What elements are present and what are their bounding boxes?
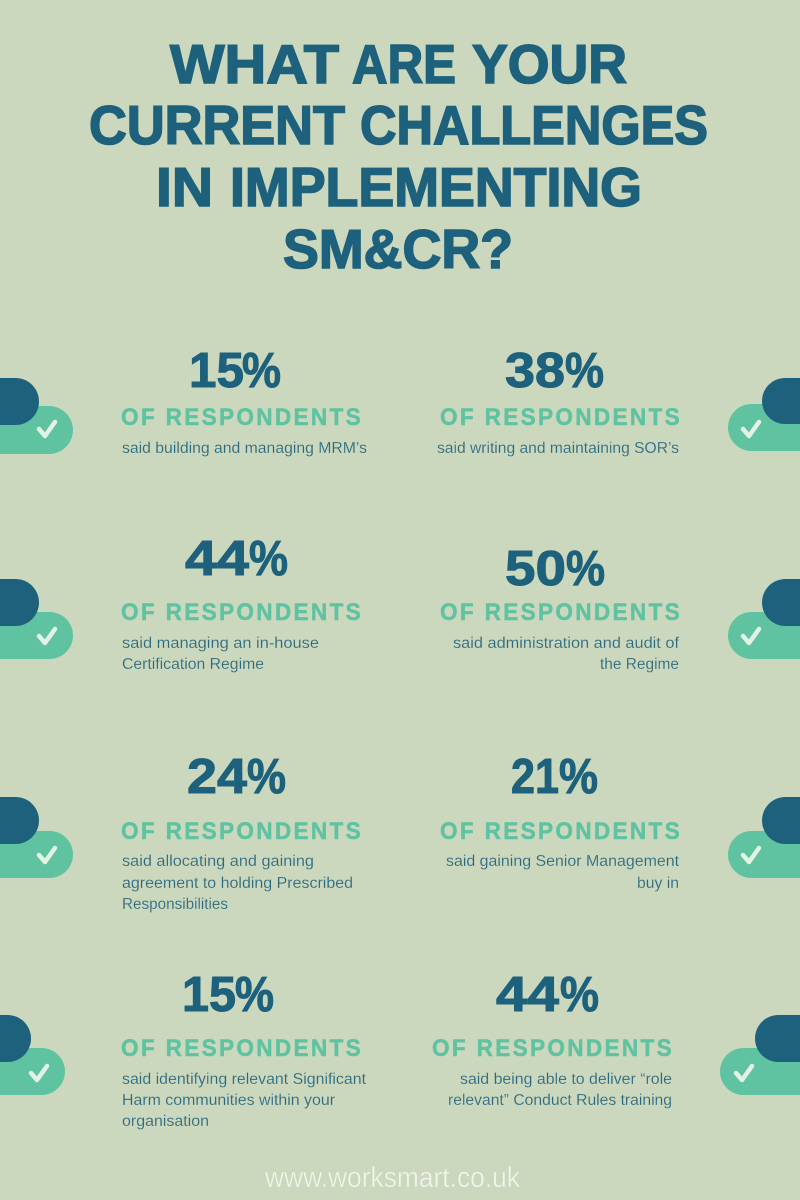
stat: 44% conduct rules: 44	[496, 968, 559, 1022]
icon: right check 3	[728, 797, 800, 878]
icon: right check 4	[720, 1015, 800, 1095]
stat: 24% prescribed responsibilities: 24	[187, 750, 247, 804]
website url: www.worksmart.co.uk	[264, 1162, 520, 1194]
stat: 24% prescribed responsibilities: Responsibilities	[122, 896, 228, 913]
stat: 21% senior management: OF RESPONDENTS	[440, 818, 682, 845]
stat: 44% conduct rules	[432, 968, 674, 1109]
stat: 15% significant harm: said identifying relevant Significant	[122, 1071, 367, 1088]
title: IMPLEMENTING	[230, 156, 642, 218]
icon: left check 4	[0, 1015, 65, 1095]
stat: 38% writing SORs	[437, 344, 682, 457]
stat: 24% prescribed responsibilities: %	[247, 750, 286, 804]
stat: 50% administration and audit: said administration and audit of	[453, 635, 680, 652]
stat: 44% conduct rules: %	[560, 968, 599, 1022]
icon: right check 1	[728, 378, 800, 451]
stat: 50% administration and audit: %	[566, 542, 605, 596]
stat: 44% in-house certification: OF RESPONDENTS	[121, 599, 363, 626]
stat: 44% conduct rules: relevant” Conduct Rules training	[448, 1092, 672, 1109]
stat: 24% prescribed responsibilities	[121, 750, 363, 913]
stat: 21% senior management: 21	[511, 750, 559, 804]
stat: 15% building MRMs: %	[242, 344, 281, 398]
title: SM&CR?	[283, 218, 513, 280]
stat: 44% in-house certification: %	[249, 532, 288, 586]
stat: 15% significant harm: %	[235, 968, 274, 1022]
title: IN	[156, 156, 213, 218]
stat: 44% conduct rules: OF RESPONDENTS	[432, 1035, 674, 1062]
stat: 50% administration and audit: the Regime	[600, 656, 679, 673]
stat: 44% in-house certification: Certification Regime	[122, 656, 264, 673]
stat: 15% significant harm: 15	[182, 968, 236, 1022]
stat: 15% building MRMs: said building and managing MRM’s	[122, 440, 367, 457]
stat: 44% in-house certification: 44	[185, 532, 249, 586]
icon: left check 3	[0, 797, 73, 878]
stat: 38% writing SORs: %	[565, 344, 604, 398]
icon: right check 2	[728, 579, 800, 659]
stat: 21% senior management	[440, 750, 682, 892]
stat: 50% administration and audit	[440, 542, 682, 673]
stat: 50% administration and audit: 50	[505, 542, 566, 596]
title: WHAT	[170, 33, 339, 95]
stat: 15% significant harm: Harm communities within your	[122, 1092, 335, 1109]
stat: 44% conduct rules: said being able to deliver “role	[460, 1071, 672, 1088]
title: ARE	[352, 33, 456, 95]
stat: 21% senior management: %	[559, 750, 598, 804]
stat: 38% writing SORs: OF RESPONDENTS	[440, 404, 682, 431]
stat: 38% writing SORs: 38	[505, 344, 565, 398]
icon: left check 1	[0, 378, 73, 454]
stat: 15% building MRMs: 15	[189, 344, 244, 398]
stat: 44% in-house certification: said managing an in-house	[122, 635, 319, 652]
stat: 44% in-house certification	[121, 532, 363, 673]
stat: 38% writing SORs: said writing and maintaining SOR’s	[437, 440, 679, 457]
stat: 21% senior management: buy in	[637, 875, 679, 892]
stat: 15% building MRMs	[121, 344, 367, 457]
stat: 15% significant harm: OF RESPONDENTS	[121, 1035, 363, 1062]
title: YOUR	[472, 33, 627, 95]
stat: 15% significant harm	[121, 968, 367, 1130]
title: CURRENT	[89, 94, 345, 156]
title	[89, 33, 708, 280]
stat: 50% administration and audit: OF RESPONDENTS	[440, 599, 682, 626]
title: CHALLENGES	[360, 94, 708, 156]
stat: 24% prescribed responsibilities: said allocating and gaining	[122, 853, 314, 870]
stat: 15% significant harm: organisation	[122, 1113, 209, 1130]
stat: 21% senior management: said gaining Senior Management	[446, 853, 680, 870]
stat: 15% building MRMs: OF RESPONDENTS	[121, 404, 363, 431]
icon: left check 2	[0, 579, 73, 659]
stat: 24% prescribed responsibilities: agreement to holding Prescribed	[122, 875, 353, 892]
stat: 24% prescribed responsibilities: OF RESPONDENTS	[121, 818, 363, 845]
